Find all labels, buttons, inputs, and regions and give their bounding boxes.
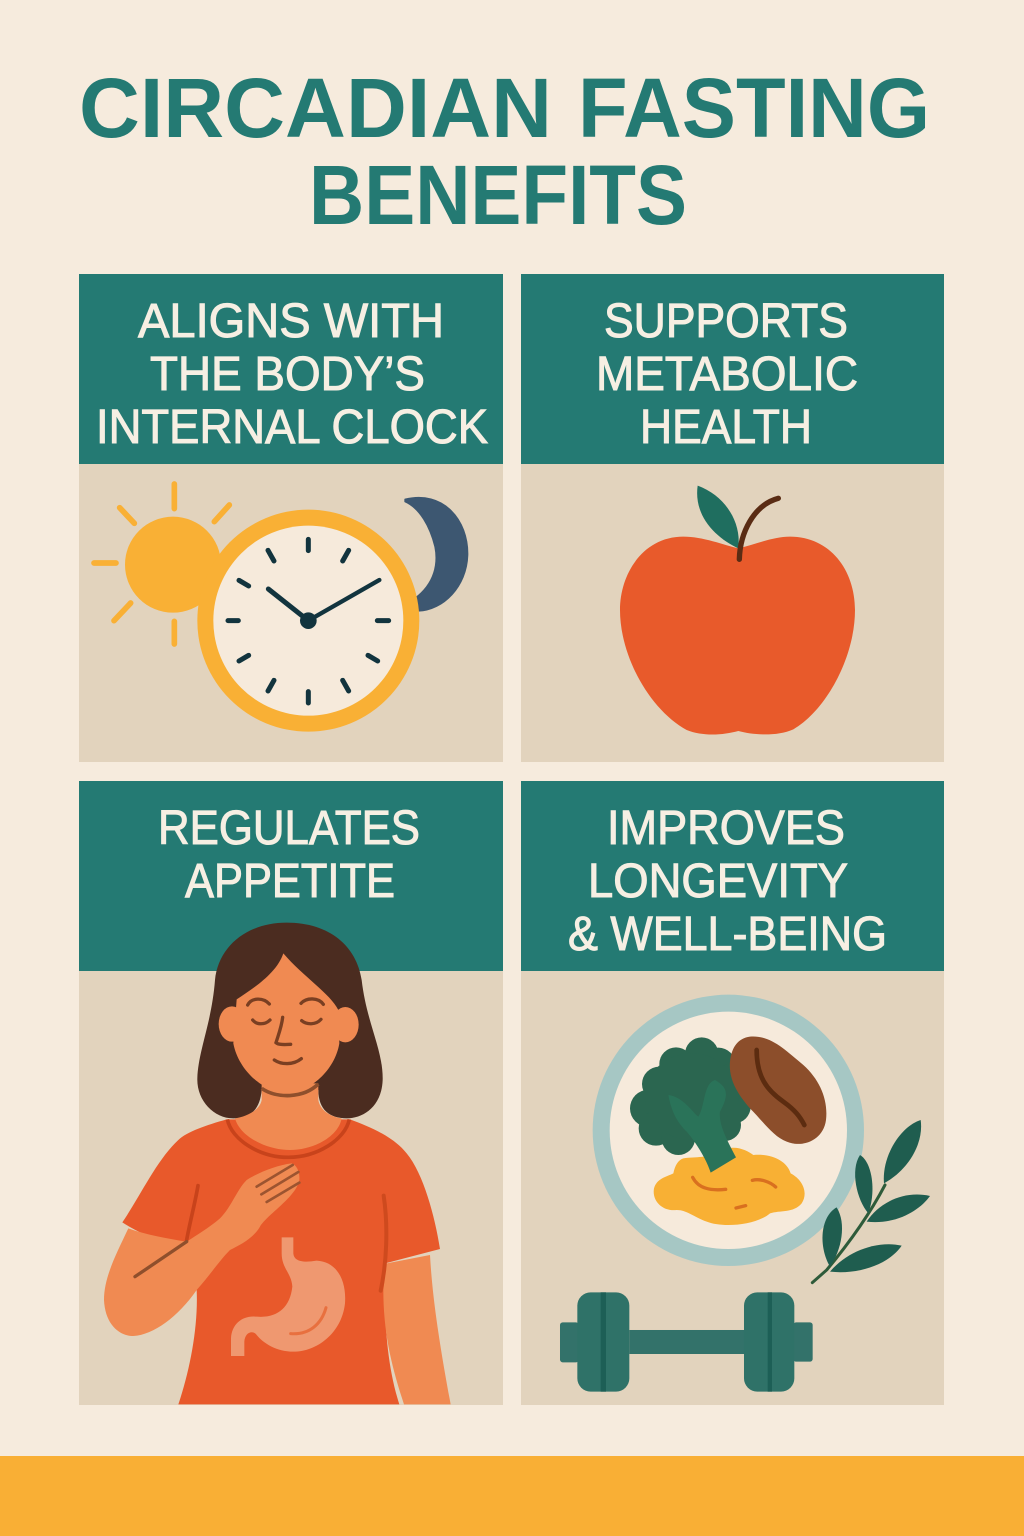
header band xyxy=(521,274,944,464)
mashed food xyxy=(654,1148,805,1225)
dumbbell xyxy=(560,1292,813,1392)
illustration: plate, herb sprig and dumbbell xyxy=(560,995,930,1392)
title: BENEFITS xyxy=(309,148,687,242)
coffee bean xyxy=(730,1037,826,1144)
header band xyxy=(79,274,503,464)
heading: & WELL-BEING xyxy=(568,908,887,961)
left arm and hand xyxy=(104,1163,299,1336)
icon: sun, clock and moon xyxy=(94,484,468,732)
panel: aligns with the body's internal clock xyxy=(79,274,503,762)
arm line xyxy=(135,1242,187,1277)
illustration: woman with hand on chest and stomach xyxy=(104,923,451,1404)
panel: improves longevity and well-being xyxy=(521,781,944,1405)
heading: HEALTH xyxy=(640,401,812,454)
heading: INTERNAL CLOCK xyxy=(96,401,488,454)
icon: clock xyxy=(197,510,419,732)
icon: moon xyxy=(405,498,468,611)
stomach xyxy=(231,1237,345,1356)
title: FASTING xyxy=(578,61,930,155)
herb sprig xyxy=(812,1120,930,1283)
shirt side seam xyxy=(381,1196,386,1291)
heading: THE BODY’S xyxy=(150,348,425,401)
panel background xyxy=(521,464,944,762)
footer bar xyxy=(0,1456,1024,1536)
heading: APPETITE xyxy=(185,855,395,908)
heading xyxy=(158,802,420,908)
title: CIRCADIAN xyxy=(79,61,552,155)
heading: SUPPORTS xyxy=(604,295,848,348)
right arm xyxy=(383,1255,451,1404)
icon: sun xyxy=(94,484,229,644)
panel: regulates appetite xyxy=(79,781,503,1405)
broccoli head xyxy=(630,1037,751,1155)
facial features xyxy=(262,1084,318,1096)
panel background xyxy=(79,971,503,1405)
title xyxy=(79,61,930,242)
heading xyxy=(568,802,887,961)
header band xyxy=(521,781,944,971)
heading xyxy=(96,295,488,454)
plate xyxy=(593,995,864,1266)
shirt xyxy=(122,1119,440,1404)
hair xyxy=(197,923,383,1118)
heading: LONGEVITY xyxy=(588,855,848,908)
heading: REGULATES xyxy=(158,802,420,855)
collar xyxy=(227,1119,349,1157)
finger lines xyxy=(257,1165,299,1202)
heading: METABOLIC xyxy=(596,348,858,401)
panel background xyxy=(79,464,503,762)
header band xyxy=(79,781,503,971)
neck xyxy=(235,1083,342,1150)
panel background xyxy=(521,971,944,1405)
heading: IMPROVES xyxy=(607,802,845,855)
sleeve line xyxy=(187,1186,198,1240)
heading xyxy=(596,295,858,454)
panel: supports metabolic health xyxy=(521,274,944,762)
icon: apple xyxy=(620,486,855,735)
broccoli stem xyxy=(668,1080,736,1173)
heading: ALIGNS WITH xyxy=(138,295,444,348)
face and ears xyxy=(219,953,359,1093)
